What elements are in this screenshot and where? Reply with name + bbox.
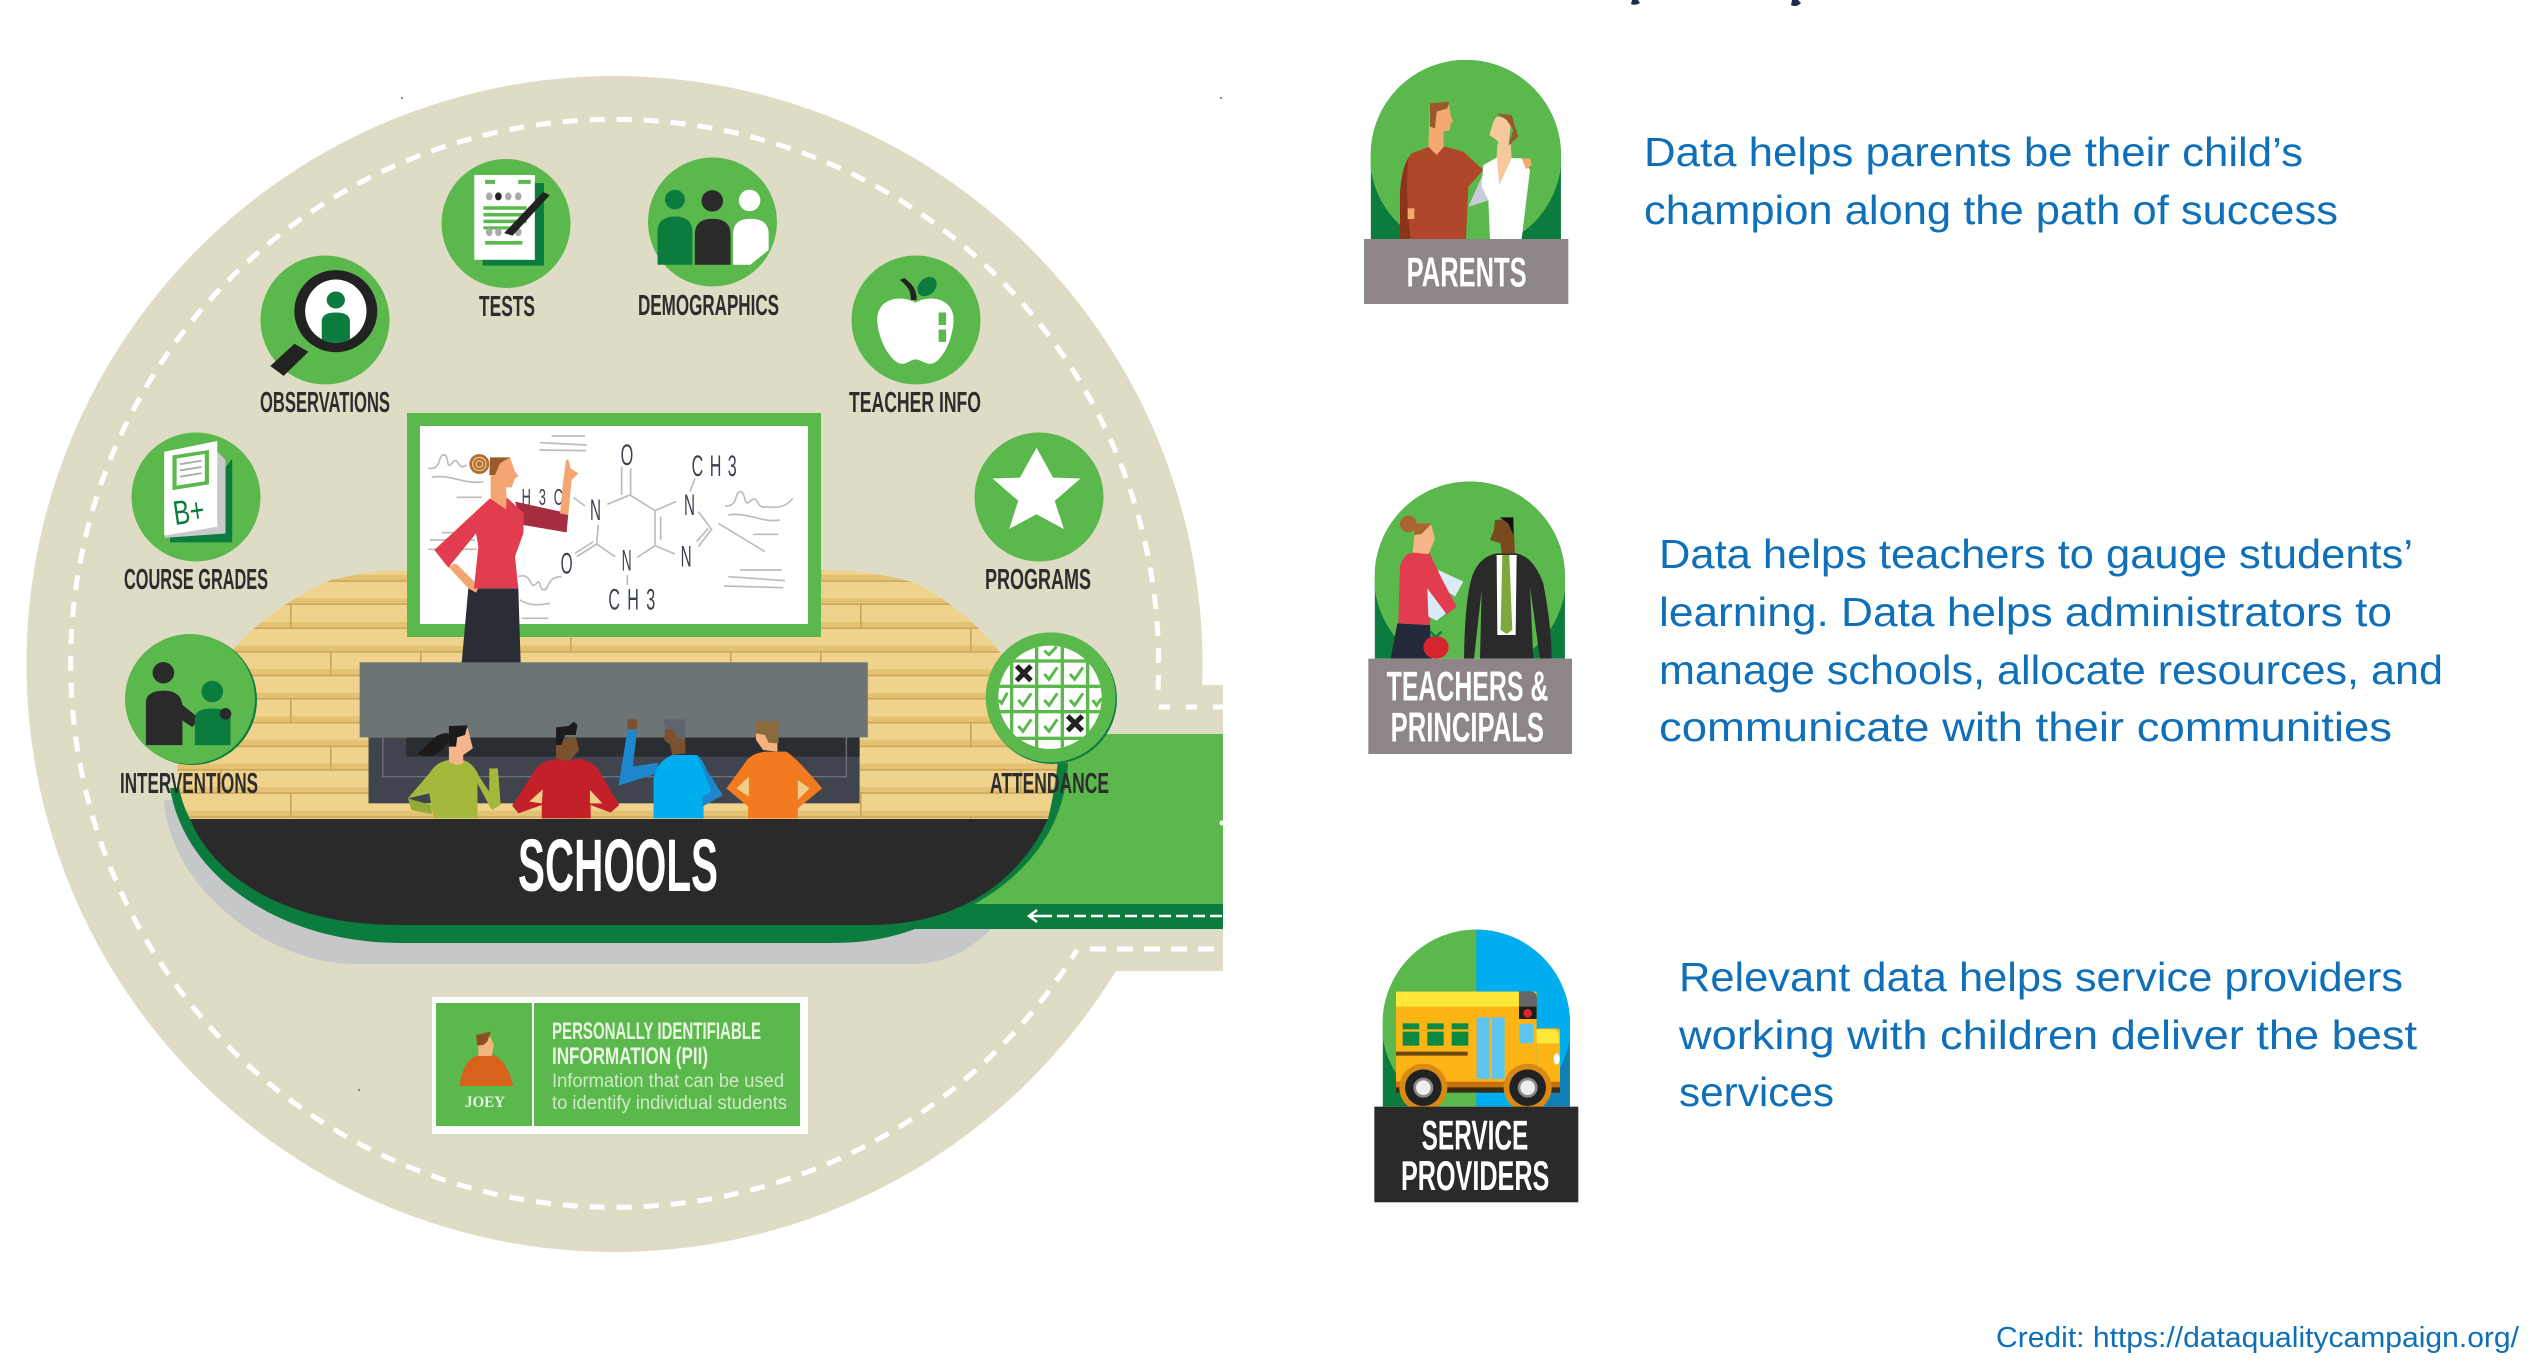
text: teachers: learning. Data helps administrators to <box>1659 589 2392 635</box>
badge: parents <box>1364 59 1568 304</box>
icon: programs star <box>974 432 1104 562</box>
text: parents: Data helps parents be their child’s <box>1644 129 2303 175</box>
panel: PII definition: Information that can be used <box>552 1071 784 1092</box>
badge: teachers and principals: PRINCIPALS <box>1391 704 1544 751</box>
icon: Joey <box>459 1032 513 1086</box>
school bus <box>1396 992 1560 1112</box>
PII text: PERSONALLY IDENTIFIABLE <box>552 1018 761 1045</box>
badge: teachers and principals <box>1368 481 1572 754</box>
teacher figure <box>434 454 578 663</box>
molecule labels: O <box>561 547 573 580</box>
molecule labels <box>522 439 743 617</box>
icon: observations <box>260 256 390 384</box>
text: teachers <box>1659 531 2443 750</box>
icon: course grades book <box>132 432 260 562</box>
badge: service providers <box>1374 928 1578 1202</box>
tan background circle <box>26 76 1223 1252</box>
icon: teacher info apple <box>852 256 980 384</box>
teacher and principal figures <box>1391 516 1552 659</box>
student: blue <box>619 719 723 818</box>
panel: schools data circle <box>26 76 1224 1252</box>
specks <box>358 97 1222 1091</box>
molecule labels: N <box>681 541 692 574</box>
badge: teachers and principals: TEACHERS & <box>1387 663 1548 710</box>
text: service providers: Relevant data helps service providers <box>1679 954 2403 1000</box>
icon: course grades book: B+ <box>171 491 207 533</box>
icon: interventions <box>125 634 257 765</box>
molecule labels: N <box>590 494 601 527</box>
molecule labels: CH3 <box>692 451 743 483</box>
molecule labels: CH3 <box>608 585 663 617</box>
text: teachers: Data helps teachers to gauge students’ <box>1659 531 2413 577</box>
label: demographics: DEMOGRAPHICS <box>638 290 779 322</box>
wood floor <box>178 570 1058 819</box>
badge: parents: PARENTS <box>1407 249 1527 296</box>
panel: PII definition: to identify individual students <box>552 1093 787 1114</box>
text: teachers: communicate with their communities <box>1659 704 2392 750</box>
label: course grades: COURSE GRADES <box>124 564 268 596</box>
dashed path ring <box>71 119 1223 1207</box>
student: red <box>512 722 619 818</box>
chalkboard lower part <box>369 737 860 803</box>
projector and students <box>360 662 868 818</box>
badge: service providers: SERVICE <box>1422 1111 1528 1158</box>
molecule labels: H3C <box>522 484 571 510</box>
label: programs: PROGRAMS <box>985 564 1091 596</box>
credit line: Credit: https://dataqualitycampaign.org/ <box>1996 1322 2520 1354</box>
dark green bowl <box>170 763 1068 943</box>
molecule labels: O <box>621 439 633 472</box>
gray screen housing <box>360 662 868 737</box>
text: parents: champion along the path of success <box>1644 187 2338 233</box>
parents figures <box>1400 102 1532 239</box>
schools heading: SCHOOLS <box>518 824 718 907</box>
text: service providers <box>1678 954 2418 1115</box>
black schools band <box>190 819 1048 925</box>
text: service providers: services <box>1679 1069 1834 1115</box>
icon: attendance <box>986 632 1117 764</box>
molecule labels: N <box>684 489 695 522</box>
icon: tests <box>442 159 570 288</box>
student: orange <box>726 721 822 818</box>
label: tests: TESTS <box>479 291 535 323</box>
text: parents <box>1644 129 2338 233</box>
student: green <box>408 725 501 818</box>
panel: PII definition: JOEY <box>465 1094 505 1111</box>
text: teachers: manage schools, allocate resources, and <box>1659 647 2443 693</box>
molecule bonds and scribbles <box>428 436 793 618</box>
molecule labels: N <box>622 545 632 578</box>
label: teacher info: TEACHER INFO <box>849 387 981 419</box>
badge: service providers: PROVIDERS <box>1401 1152 1549 1199</box>
green road to the right <box>900 734 1224 929</box>
label: attendance: ATTENDANCE <box>990 768 1109 800</box>
label: interventions: INTERVENTIONS <box>120 768 258 800</box>
panel: PII definition: INFORMATION (PII) <box>552 1043 708 1070</box>
icon: demographics <box>648 158 777 286</box>
panel: PII definition <box>432 997 808 1134</box>
text: service providers: working with children deliver the best <box>1678 1012 2418 1058</box>
whiteboard with molecule <box>407 413 821 663</box>
bowl shadow <box>164 800 990 964</box>
cut-off title descenders <box>1631 0 1801 6</box>
label: observations: OBSERVATIONS <box>260 387 390 419</box>
